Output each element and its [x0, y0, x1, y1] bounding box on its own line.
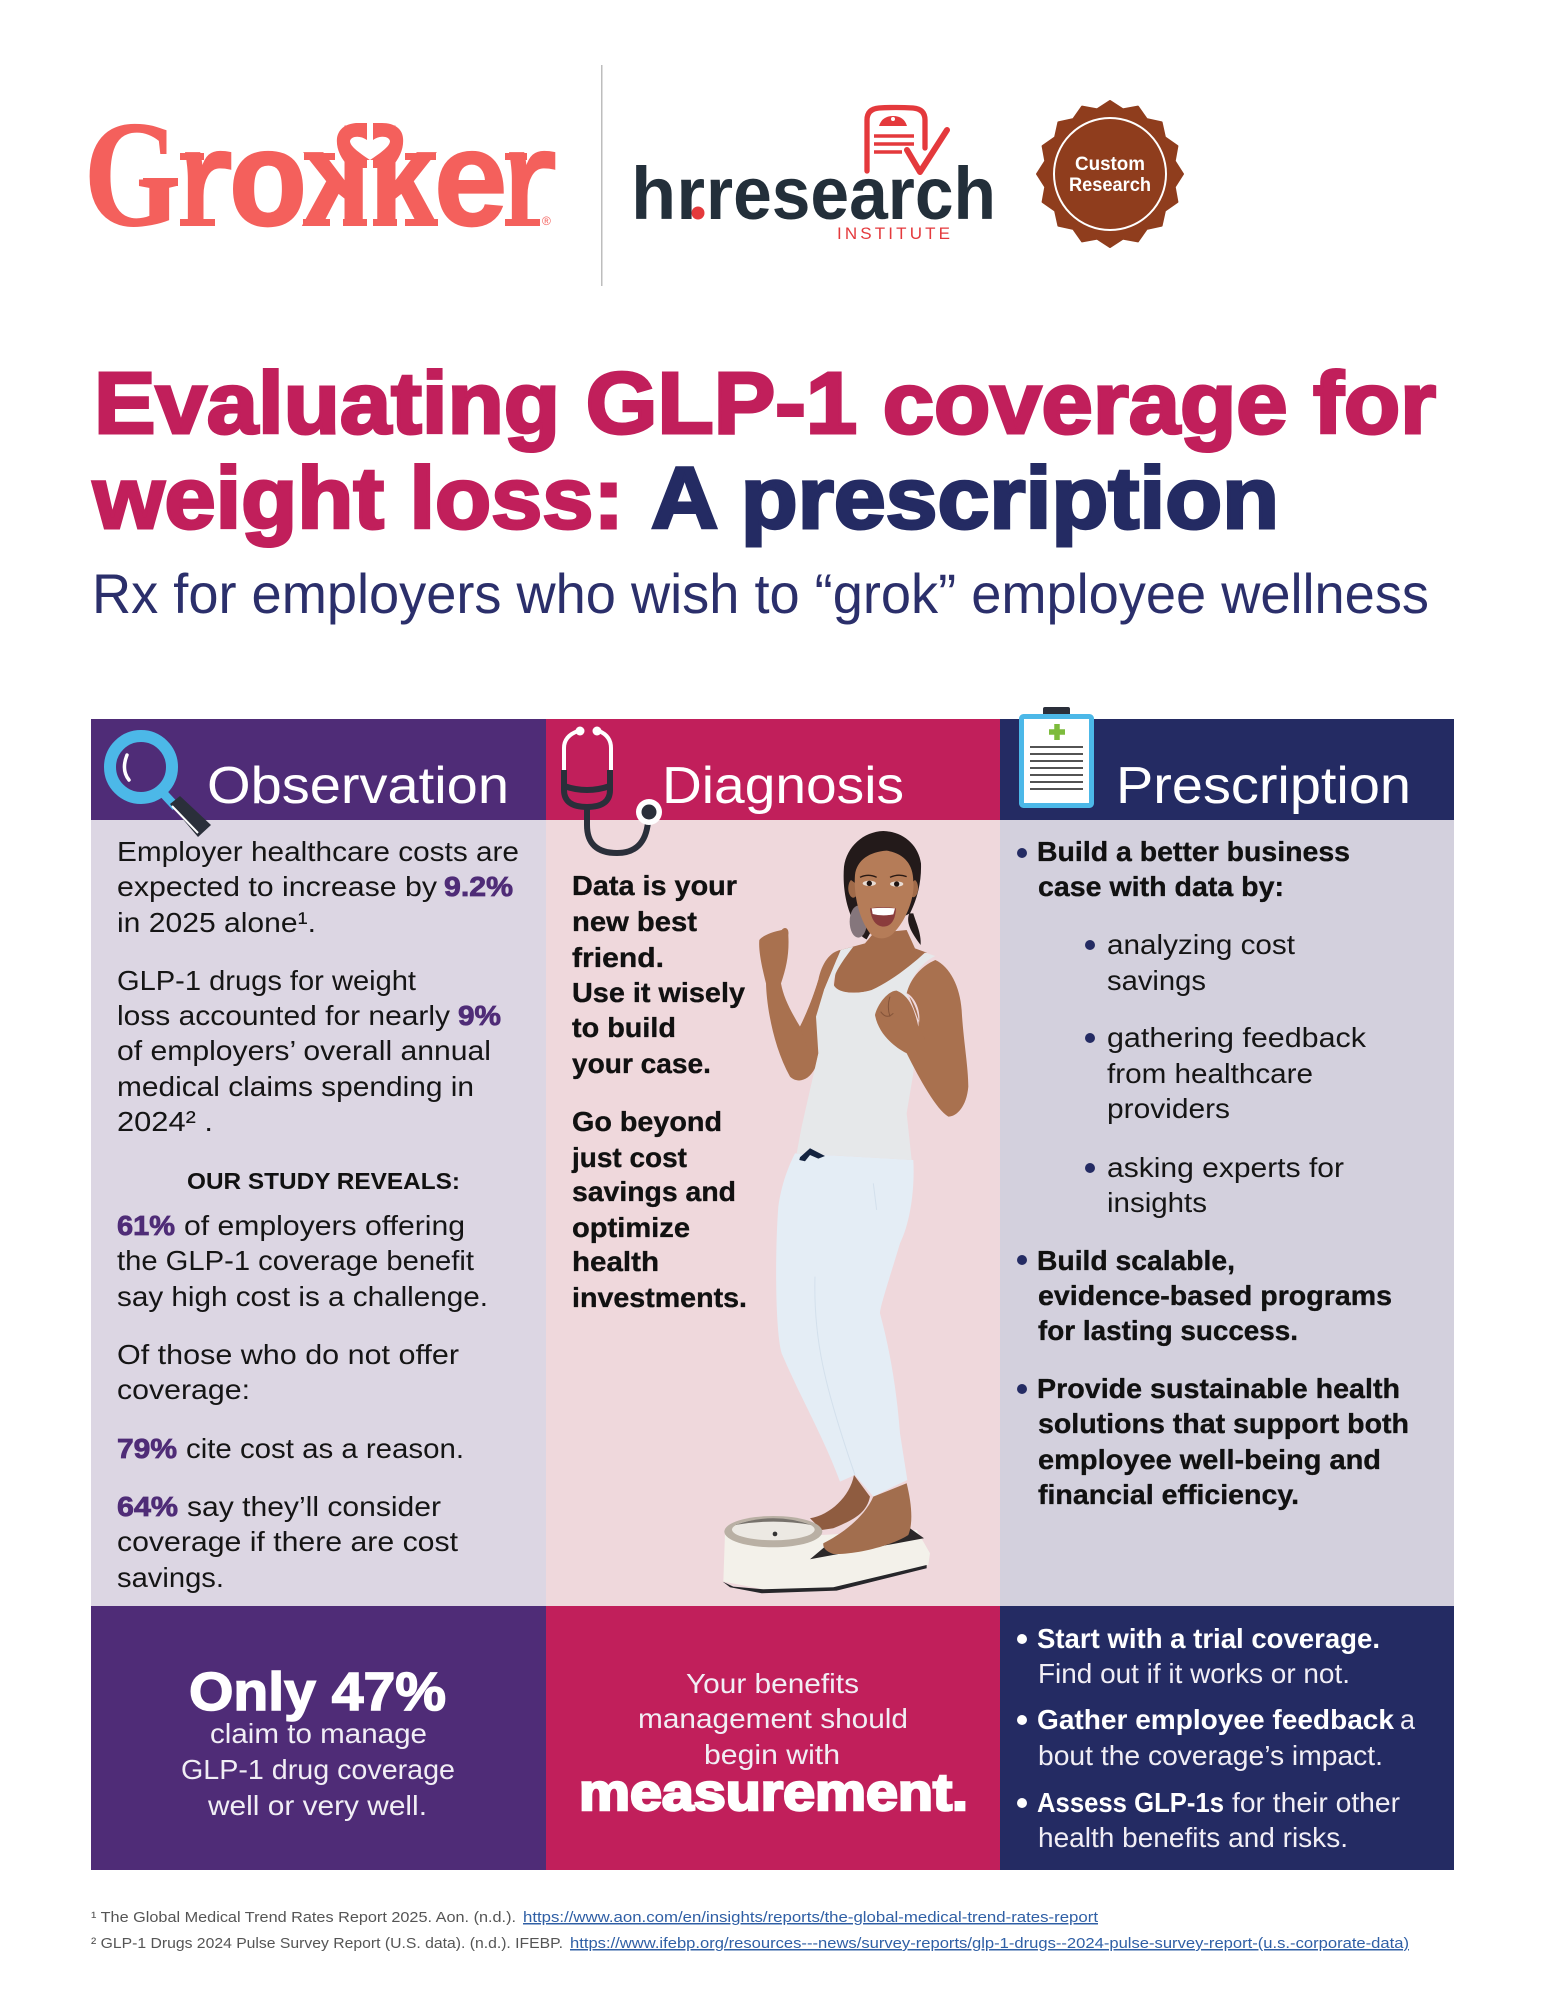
- text: data is your new best friend: to build: [572, 1012, 676, 1043]
- logo: Grokker: [84, 90, 562, 266]
- sub-bullet: analyzing cost savings: analyzing cost: [1107, 929, 1295, 960]
- badge: custom research seal: Research: [1069, 175, 1151, 196]
- text: GLP-1 spending: 9%: [458, 1000, 501, 1031]
- subtitle: Rx for employers who wish to “grok” employee wellness: [92, 562, 1429, 625]
- sub-bullet: asking experts: [1085, 1152, 1344, 1218]
- text: employer healthcare costs: 9.2%: [444, 871, 513, 902]
- text: GLP-1 spending: medical claims spending in: [117, 1071, 474, 1102]
- panel: diagnosis: [546, 719, 1000, 1606]
- title: weight loss:: [92, 450, 624, 547]
- heading: prescription: Prescription: [1116, 757, 1411, 815]
- bullet: assess GLP-1s: for their other: [1232, 1787, 1400, 1818]
- icon: magnifying glass: [110, 736, 211, 837]
- callout: measurement: begin with: [704, 1739, 840, 1770]
- text: employer healthcare costs: [117, 836, 519, 938]
- illustration: woman celebrating on a scale: [723, 831, 968, 1593]
- bullet: assess GLP-1s: health benefits and risks.: [1038, 1822, 1348, 1853]
- text: GLP-1 spending: loss accounted for nearly: [117, 1000, 450, 1031]
- text: data is your new best friend: your case.: [572, 1048, 711, 1079]
- panel: prescription: [1000, 707, 1454, 1606]
- stat: 61%: 61%: [117, 1210, 175, 1241]
- text: data is your new best friend: Data is your: [572, 870, 737, 901]
- panel: observation: [91, 719, 546, 1606]
- sub-bullet: asking experts: insights: [1107, 1187, 1207, 1218]
- sub-bullet: gathering feedback: [1085, 1022, 1367, 1124]
- callout: only 47%: GLP-1 drug coverage: [181, 1754, 455, 1785]
- text: employer healthcare costs: expected to increase by: [117, 871, 437, 902]
- text: go beyond just cost savings: health: [572, 1246, 659, 1277]
- stat: 64%: savings.: [117, 1562, 224, 1593]
- callout: measurement: measurement.: [579, 1764, 968, 1822]
- text: go beyond just cost savings: investments.: [572, 1282, 747, 1313]
- callout: measurement: Your benefits: [686, 1668, 859, 1699]
- logo: Grokker: ®: [542, 214, 551, 228]
- text: data is your new best friend: new best: [572, 906, 697, 937]
- bullet: start with a trial: Find out if it works or not.: [1038, 1658, 1350, 1689]
- text: GLP-1 spending: GLP-1 drugs for weight: [117, 965, 416, 996]
- text: employer healthcare costs: Employer healthcare costs are: [117, 836, 519, 867]
- slab serifs on the Grokker letters: [143, 153, 540, 226]
- icon: stethoscope: [564, 726, 662, 853]
- logo: Grokker: k: [368, 112, 440, 266]
- stat: 61%: say high cost is a challenge.: [117, 1281, 488, 1312]
- scale and legs: [723, 1153, 930, 1593]
- stat: 61%: of employers offering: [184, 1210, 465, 1241]
- badge: custom research seal: [1037, 101, 1183, 247]
- sub-bullet: analyzing cost savings: [1085, 929, 1295, 996]
- stat: 61%: the GLP-1 coverage benefit: [117, 1245, 474, 1276]
- text: go beyond just cost savings: Go beyond: [572, 1106, 722, 1137]
- logo: Grokker: r: [176, 112, 238, 266]
- stat: 64%: 64%: [117, 1491, 178, 1522]
- text: data is your new best friend: Use it wisely: [572, 977, 745, 1008]
- callout: measurement: [546, 1606, 1000, 1870]
- logo: Grokker: e: [433, 112, 509, 266]
- footnotes: ¹ The Global Medical Trend Rates Report 2025. Aon. (n.d.).: [91, 1909, 516, 1926]
- text: employer healthcare costs: in 2025 alone¹.: [117, 907, 316, 938]
- sub-bullet: gathering feedback: from healthcare: [1107, 1058, 1313, 1089]
- footnotes: [91, 1909, 1409, 1952]
- text: GLP-1 spending: 2024² .: [117, 1106, 213, 1137]
- bullet: scalable programs: evidence-based programs: [1038, 1280, 1392, 1311]
- text: GLP-1 spending: [117, 965, 501, 1137]
- footnotes: https://www.aon.com/en/insights/reports/the-global-medical-trend-rates-report: [523, 1909, 1099, 1926]
- bullet: sustainable solutions: financial efficiency.: [1038, 1479, 1299, 1510]
- heading: diagnosis: Diagnosis: [662, 757, 904, 815]
- bullet: scalable programs: Build scalable,: [1037, 1245, 1235, 1276]
- badge: custom research seal: Custom: [1075, 154, 1145, 175]
- stat: 64%: coverage if there are cost: [117, 1526, 458, 1557]
- bullet: start with a trial: [1017, 1623, 1380, 1689]
- bullet: assess GLP-1s: Assess GLP-1s: [1037, 1787, 1224, 1818]
- title: Evaluating GLP-1 coverage for: [94, 355, 1436, 452]
- bullet: gather feedback: a: [1400, 1704, 1415, 1735]
- text: go beyond just cost savings: savings and: [572, 1176, 736, 1207]
- bullet: gather feedback: Gather employee feedback: [1037, 1704, 1394, 1735]
- callout: only 47%: well or very well.: [207, 1790, 427, 1821]
- bullet: sustainable solutions: solutions that support both: [1038, 1408, 1409, 1439]
- bullet: sustainable solutions: [1017, 1373, 1409, 1510]
- text: those who do not offer: coverage:: [117, 1374, 250, 1405]
- logo: Grokker: r: [500, 112, 562, 266]
- callout: measurement: management should: [638, 1703, 908, 1734]
- stat: 64%: say they’ll consider: [187, 1491, 441, 1522]
- footnotes: https://www.ifebp.org/resources---news/survey-reports/glp-1-drugs--2024-pulse-survey-report-(u.s.-corporate-data): [570, 1935, 1409, 1952]
- callout: next steps: [1000, 1606, 1454, 1870]
- bullet: scalable programs: for lasting success.: [1038, 1315, 1298, 1346]
- footnotes: ² GLP-1 Drugs 2024 Pulse Survey Report (U.S. data). (n.d.). IFEBP.: [91, 1935, 563, 1952]
- text: those who do not offer: Of those who do not offer: [117, 1339, 459, 1370]
- text: those who do not offer: [117, 1339, 459, 1405]
- bullet: better business case: [1017, 836, 1350, 902]
- title: A prescription: [651, 450, 1279, 547]
- bullet: start with a trial: Start with a trial coverage.: [1037, 1623, 1380, 1654]
- logo: Grokker: G: [84, 90, 180, 258]
- title: [92, 355, 1436, 547]
- logo: hr.research institute: INSTITUTE: [837, 224, 950, 243]
- logo: Grokker: o: [228, 112, 308, 266]
- stat: 79%: cite cost as a reason.: [186, 1433, 464, 1464]
- icon: clipboard: [1022, 707, 1092, 806]
- logo: hr.research institute: [631, 108, 996, 243]
- logo: Grokker: k: [300, 112, 372, 266]
- callout: only 47%: Only 47%: [189, 1662, 446, 1722]
- callout: only 47%: claim to manage: [210, 1718, 427, 1749]
- bullet: better business case: Build a better business: [1037, 836, 1350, 867]
- heading: observation: Observation: [207, 757, 509, 815]
- logo: hr.research institute: hr: [631, 152, 705, 235]
- text: go beyond just cost savings: just cost: [571, 1142, 687, 1173]
- text: data is your new best friend: friend.: [572, 942, 664, 973]
- sub-bullet: gathering feedback: gathering feedback: [1107, 1022, 1367, 1053]
- callout: only 47%: [91, 1606, 546, 1870]
- text: go beyond just cost savings: optimize: [572, 1212, 690, 1243]
- bullet: assess GLP-1s: [1017, 1787, 1400, 1853]
- bullet: gather feedback: bout the coverage’s impact.: [1038, 1740, 1383, 1771]
- stat: 79%: 79%: [117, 1433, 177, 1464]
- upper body: [759, 831, 968, 1161]
- text: GLP-1 spending: of employers’ overall annual: [117, 1035, 491, 1066]
- bullet: sustainable solutions: employee well-being and: [1038, 1444, 1381, 1475]
- bullet: gather feedback: [1017, 1704, 1415, 1771]
- logo: hr.research institute: research: [706, 152, 996, 235]
- icon: document with check mark: [867, 108, 947, 172]
- bullet: scalable programs: [1017, 1245, 1392, 1346]
- text: go beyond just cost savings: [571, 1106, 747, 1313]
- stat: 61%: [117, 1210, 488, 1312]
- bullet: sustainable solutions: Provide sustainable health: [1037, 1373, 1400, 1404]
- sub-bullet: analyzing cost savings: savings: [1107, 965, 1206, 996]
- stat: 64%: [117, 1491, 458, 1593]
- text: data is your new best friend: [572, 870, 745, 1079]
- subheading: our study reveals: OUR STUDY REVEALS:: [187, 1168, 460, 1194]
- bullet: better business case: case with data by:: [1038, 871, 1284, 902]
- sub-bullet: gathering feedback: providers: [1107, 1093, 1230, 1124]
- divider: [601, 65, 602, 286]
- sub-bullet: asking experts: asking experts for: [1107, 1152, 1344, 1183]
